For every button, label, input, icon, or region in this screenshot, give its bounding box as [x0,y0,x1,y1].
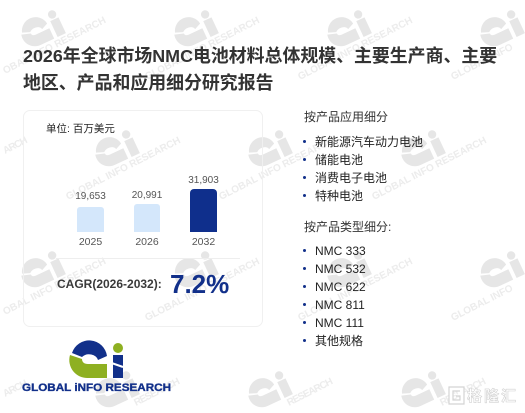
logo: Global Info Research [22,340,171,394]
source name: 格隆汇 [467,385,516,406]
background watermark pattern: OBAL INFO RESEARCH [1,256,108,318]
list: applications: 新能源汽车动力电池 [315,135,423,149]
background watermark pattern: GLOBAL INFO RESEARCH [296,15,415,83]
heading: by application: 按产品应用细分 [304,110,388,124]
CAGR value: 7.2% [170,269,229,299]
value 2025: 19,653 [75,191,106,202]
icon: G mark [449,387,464,404]
list: applications: 消费电子电池 [315,171,387,185]
icon: Gi mark [69,340,123,378]
background watermark pattern: RESEARCH [438,376,488,409]
background watermark pattern: GLOBAL INFO [449,42,515,83]
logo wordmark: GLOBAL iNFO RESEARCH [22,382,171,394]
unit label: 单位: 百万美元 [46,123,115,135]
year 2032: 2032 [192,236,215,248]
bar chart [75,175,219,248]
list: applications [303,135,423,203]
list: product types: NMC 622 [315,280,366,294]
title: 地区、产品和应用细分研究报告 [23,73,273,93]
list: product types: NMC 111 [315,316,364,330]
background watermark pattern: GLOBAL INFO RESEARCH [296,256,415,324]
CAGR label: CAGR(2026-2032): [57,277,162,291]
list: product types: NMC 333 [315,244,366,258]
bar 2026 [134,204,160,232]
background watermark pattern: OBAL INFO RESEARCH [1,15,108,77]
list: applications: 储能电池 [315,153,363,167]
year 2026: 2026 [135,236,159,248]
background watermark pattern: GLOBAL INFO RESEARCH [64,135,183,203]
title [23,46,497,93]
title: 2026年全球市场NMC电池材料总体规模、主要生产商、主要 [23,46,497,66]
background watermark pattern: RESEARCH [132,376,182,409]
bar 2032 [190,189,217,232]
list: product types: 其他规格 [315,334,363,348]
year 2025: 2025 [79,236,102,248]
list: product types [303,244,366,348]
background watermark pattern: GLOBAL INFO [449,283,515,324]
background watermark pattern: RESEARCH [285,376,335,409]
list: product types: NMC 532 [315,262,366,276]
background watermark pattern: ARCH [1,378,30,400]
background watermark pattern: GLOBAL INFO RESEARCH [143,15,262,83]
panel: market size chart card [23,110,263,327]
background watermark pattern: GLOBAL INFO RESEARCH [370,135,489,203]
heading: by type: 按产品类型细分: [304,220,391,234]
list: product types: NMC 811 [315,298,365,312]
source watermark: Gelonghui [448,385,516,406]
background watermark pattern: GLOBAL INFO RESEARCH [217,135,336,203]
value 2032: 31,903 [188,175,219,186]
background watermark pattern: GLOBAL INFO RESEARCH [143,256,262,324]
list: applications: 特种电池 [315,189,363,203]
background watermark pattern: ARCH [1,135,30,157]
value 2026: 20,991 [132,190,162,201]
bar 2025 [77,207,104,232]
